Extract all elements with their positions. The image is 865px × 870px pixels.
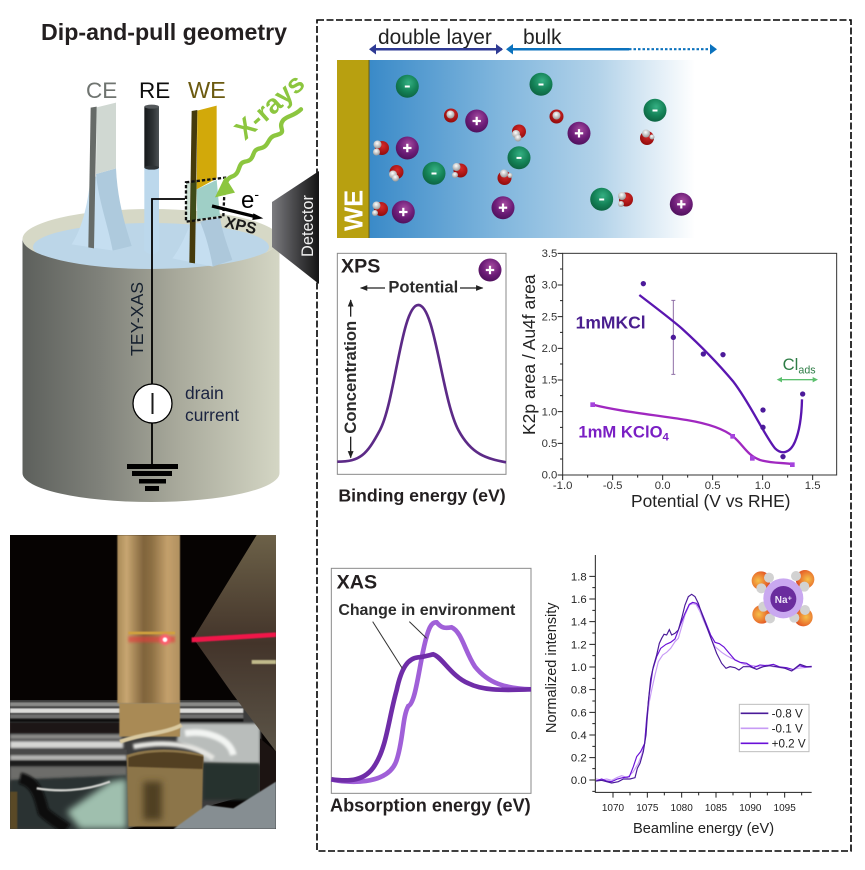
y tick labels: 1.2 — [571, 639, 587, 651]
x tick labels: 0.5 — [705, 480, 721, 492]
working electrode bar — [337, 60, 369, 238]
chart: Na K-edge spectra — [571, 555, 814, 814]
anions — [396, 73, 666, 211]
laser spot — [128, 632, 175, 645]
arrows: concentration — [349, 300, 353, 458]
label: XPS: XPS — [223, 214, 258, 238]
arrow: bulk — [506, 44, 717, 54]
label: Concentration: Concentration — [341, 321, 360, 434]
axes — [589, 555, 812, 798]
x tick labels: 1095 — [774, 803, 796, 814]
label: CE: CE — [86, 78, 117, 103]
x tick labels: 1090 — [739, 803, 762, 814]
axis label: normalized intensity: Normalized intensity — [544, 602, 560, 733]
spectrum: +0.2 V — [596, 602, 812, 782]
electrodes — [72, 103, 301, 267]
label: bulk: bulk — [523, 26, 562, 49]
x tick labels: 0.0 — [655, 480, 671, 492]
label: Cl ads: Cl — [783, 355, 798, 374]
curve: KClO4 — [593, 405, 793, 464]
diagram: dip-and-pull cell — [22, 68, 310, 502]
y tick labels: 0.0 — [571, 775, 587, 787]
arrow: Cl ads range — [777, 377, 818, 382]
label: X-rays: X-rays — [229, 68, 310, 145]
icon: solvated Na+: Na — [775, 595, 788, 606]
wiring: drain current circuit — [127, 199, 185, 491]
electrode: WE — [172, 106, 232, 267]
panel: XAS schematic — [330, 568, 531, 816]
label: WE: WE — [188, 77, 226, 103]
x tick labels — [602, 803, 796, 814]
icon: solvated Na+ — [752, 570, 814, 626]
axis label: K2p ratio: K2p area / Au4f area — [519, 274, 539, 435]
dotted sampling box — [186, 178, 225, 222]
panel: spectroscopy dashed frame — [317, 20, 851, 851]
laser prism — [192, 535, 276, 792]
XAS curve: reference — [331, 654, 531, 780]
legend: -0.1 V — [772, 722, 803, 735]
axis label: binding energy: Binding energy (eV) — [338, 486, 506, 506]
legend — [739, 704, 809, 752]
y tick labels: 1.6 — [571, 594, 587, 606]
icon: solvated Na+: + — [788, 593, 792, 602]
photo: electrode in electrolyte — [10, 535, 276, 829]
x tick labels: 1070 — [602, 803, 625, 814]
detector — [272, 171, 319, 284]
label: double layer: double layer — [378, 26, 492, 49]
label: e-: e — [241, 187, 254, 214]
chart: K2p area vs potential — [542, 248, 837, 492]
bottom right shards — [173, 782, 276, 829]
cations — [392, 110, 693, 224]
arrow: XPS electrons — [212, 206, 263, 220]
label: change in environment: Change in environment — [338, 602, 516, 619]
leader lines — [373, 622, 427, 668]
label: TEY-XAS: TEY-XAS — [127, 282, 147, 356]
points: KCl — [641, 281, 805, 459]
y tick labels: 2.5 — [542, 311, 557, 323]
axis label: beamline energy: Beamline energy (eV) — [633, 821, 774, 837]
arrows: potential — [361, 286, 483, 290]
y tick labels: 2.0 — [542, 343, 557, 355]
label: e-: - — [254, 186, 259, 202]
axis label: absorption energy: Absorption energy (eV) — [330, 796, 531, 816]
x tick labels: 1085 — [705, 803, 728, 814]
label: drain current second line: current — [185, 405, 239, 425]
y tick labels: 0.6 — [571, 707, 587, 719]
points: KClO4 — [590, 402, 795, 467]
legend: +0.2 V — [772, 737, 806, 750]
panel: XPS schematic — [337, 253, 506, 506]
x tick labels: 1075 — [636, 803, 659, 814]
y tick labels: 0.4 — [571, 730, 587, 742]
y tick labels — [542, 248, 557, 482]
arrow: double layer — [369, 44, 503, 54]
heading: XPS: XPS — [341, 256, 380, 278]
water molecules — [372, 108, 654, 216]
spectrum: -0.1 V — [596, 604, 812, 780]
water and glass — [10, 700, 260, 829]
label: drain current: drain — [185, 383, 224, 403]
y tick labels: 1.0 — [542, 406, 557, 418]
x tick labels: -1.0 — [553, 480, 572, 492]
XAS curve: shifted — [331, 622, 531, 782]
y tick labels: 3.0 — [542, 280, 557, 292]
curve: KCl — [639, 295, 802, 452]
XPS peak curve — [337, 305, 506, 462]
label: Cl ads: ads — [798, 364, 816, 376]
y tick labels: 0.2 — [571, 753, 587, 765]
y tick labels: 1.5 — [542, 375, 557, 387]
x tick labels: 1080 — [671, 803, 693, 814]
x tick labels: 1.5 — [805, 480, 821, 492]
y tick labels: 0.0 — [542, 470, 557, 482]
icon: cation — [478, 258, 501, 281]
axis label: potential: Potential (V vs RHE) — [631, 491, 790, 511]
y tick labels: 1.0 — [571, 662, 587, 674]
label: 1mM KClO4: 1mM KClO — [578, 422, 663, 441]
icon: x-ray wave arrow — [215, 109, 301, 197]
y tick labels: 0.5 — [542, 438, 557, 450]
working electrode bar: WE — [340, 190, 368, 231]
label: 1mMKCl: 1mMKCl — [576, 312, 646, 332]
x tick labels: -0.5 — [603, 480, 622, 492]
x tick labels: 1.0 — [755, 480, 771, 492]
electrode: RE — [144, 105, 159, 254]
label: 1mM KClO4: 4 — [663, 432, 670, 444]
electrode: CE — [72, 103, 132, 251]
error bar — [671, 300, 675, 374]
spectrum: -0.8 V — [596, 594, 812, 783]
x tick labels — [553, 480, 821, 492]
title: Dip-and-pull geometry — [41, 19, 287, 45]
heading: XAS: XAS — [337, 571, 377, 593]
detector: Detector — [299, 195, 317, 257]
gold working electrode — [117, 535, 203, 827]
y tick labels: 3.5 — [542, 248, 557, 260]
y tick labels — [571, 571, 587, 787]
axes — [558, 253, 837, 480]
legend: -0.8 V — [772, 707, 803, 720]
y tick labels: 1.4 — [571, 617, 587, 629]
panel: double layer illustration — [337, 26, 717, 238]
electrolyte gradient — [369, 60, 695, 238]
cylinder cell — [22, 209, 280, 502]
label: RE: RE — [139, 78, 170, 103]
y tick labels: 0.8 — [571, 685, 587, 697]
label: Potential: Potential — [388, 278, 458, 297]
y tick labels: 1.8 — [571, 571, 587, 583]
